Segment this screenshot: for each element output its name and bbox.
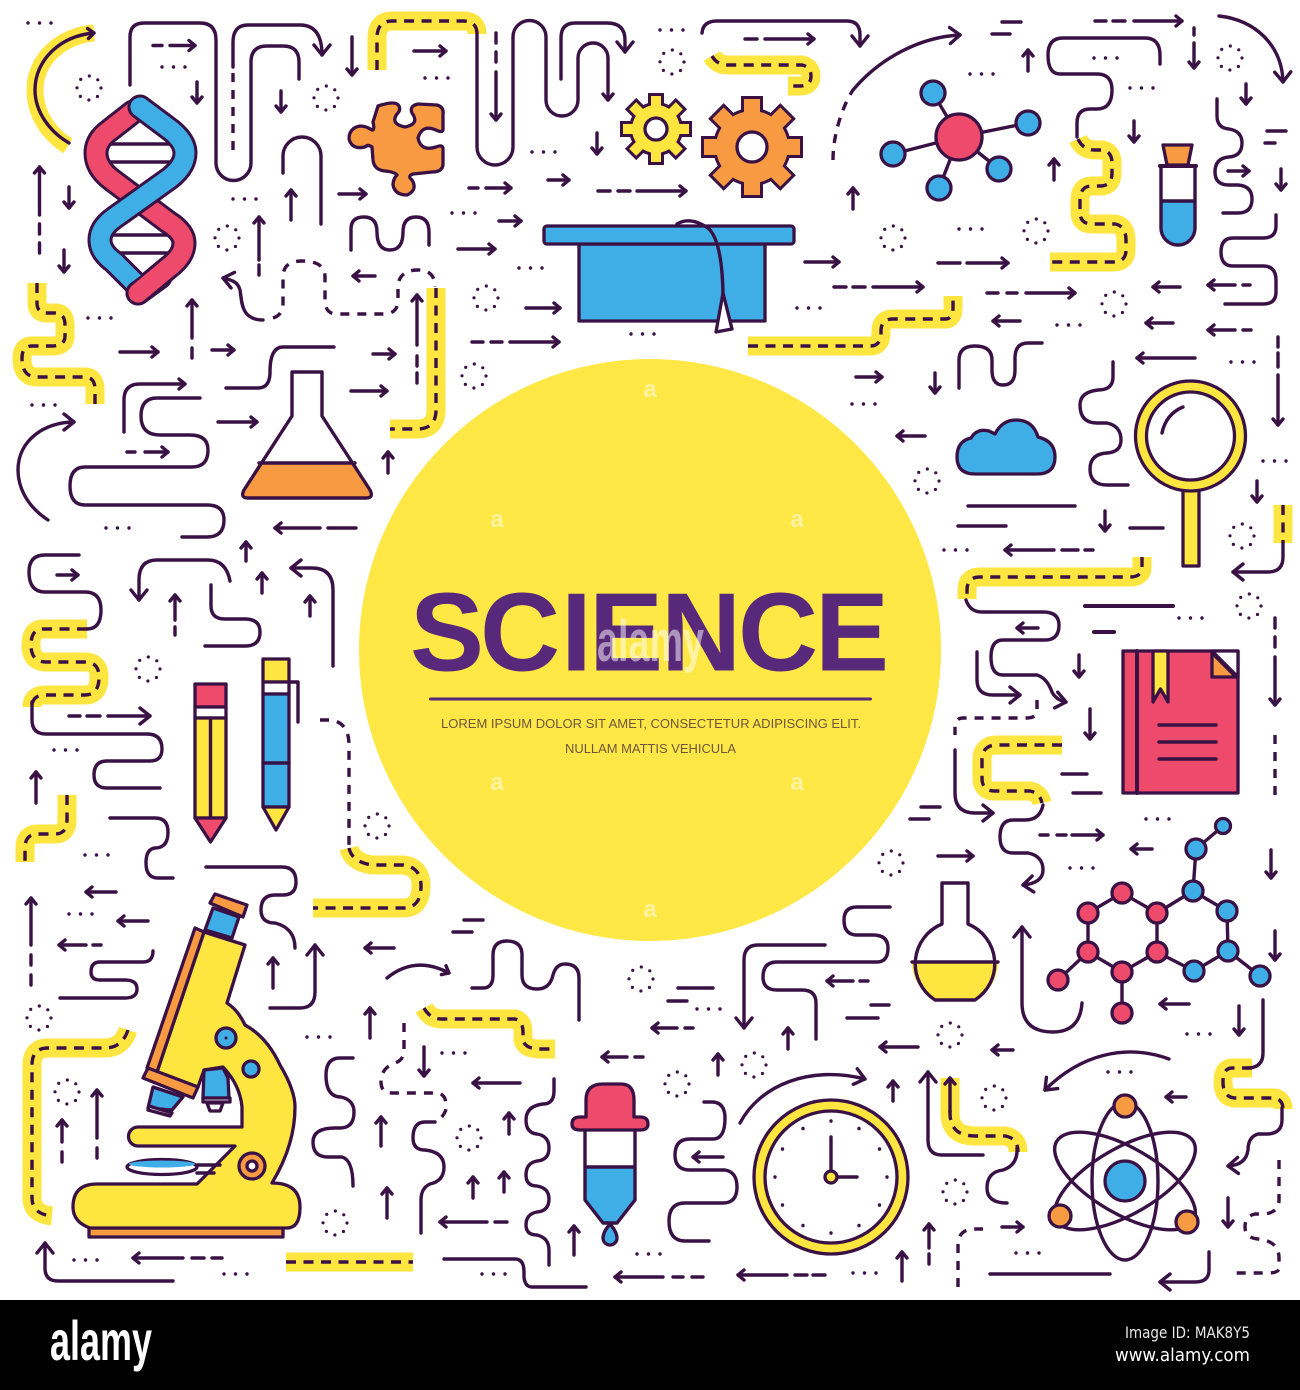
icon: small gear [623, 96, 689, 162]
icon: atom [1040, 1095, 1210, 1260]
icon: pen [263, 659, 298, 830]
watermark: a [490, 506, 504, 533]
footer bar [0, 1300, 1300, 1390]
connector lines and arrows: top centre [414, 20, 960, 342]
central yellow circle [359, 359, 941, 941]
icon: molecule network [881, 81, 1040, 200]
watermark: a [790, 506, 804, 533]
footer logo: alamy [50, 1309, 152, 1372]
connector lines and arrows: right middle [910, 481, 1283, 885]
icon: large gear [704, 99, 800, 195]
subtitle text: NULLAM MATTIS VEHICULA [565, 741, 736, 756]
connector lines and arrows: bottom centre [440, 907, 918, 1287]
footer image id: Image ID: MAK8Y5 [1125, 1323, 1250, 1342]
title rule [429, 698, 872, 700]
connector lines and arrows: bottom left [31, 892, 449, 1281]
watermark: a [790, 769, 804, 796]
icon: conical flask [243, 372, 371, 498]
icon: clock [754, 1100, 908, 1254]
subtitle text [441, 716, 861, 756]
icon: round flask [912, 883, 998, 1000]
watermark: a [490, 769, 504, 796]
icon: hexagonal molecule [1048, 818, 1270, 1023]
connector lines and arrows: top left [18, 23, 435, 537]
subtitle text: LOREM IPSUM DOLOR SIT AMET, CONSECTETUR ADIPISCING ELIT. [441, 716, 861, 731]
watermark: a [643, 376, 657, 403]
watermark: alamy [597, 609, 704, 674]
icon: book [1123, 651, 1238, 793]
connector lines and arrows: bottom right [893, 927, 1282, 1287]
watermark [490, 376, 804, 923]
icon: cloud [957, 420, 1055, 474]
icon: pencil [195, 684, 226, 842]
icon: DNA helix [96, 107, 185, 293]
connector lines and arrows: left middle [29, 542, 349, 948]
watermark: a [643, 896, 657, 923]
icon: dropper [572, 1084, 648, 1245]
footer url: www.alamy.com [1115, 1345, 1250, 1366]
title: SCIENCE [410, 570, 889, 694]
icon: microscope [73, 894, 300, 1237]
icon: puzzle piece [349, 103, 443, 195]
connector lines and arrows: top right [856, 16, 1286, 485]
icon: magnifying glass [1136, 381, 1246, 566]
icon: test tube [1160, 145, 1196, 245]
icon: graduation cap [544, 221, 794, 332]
